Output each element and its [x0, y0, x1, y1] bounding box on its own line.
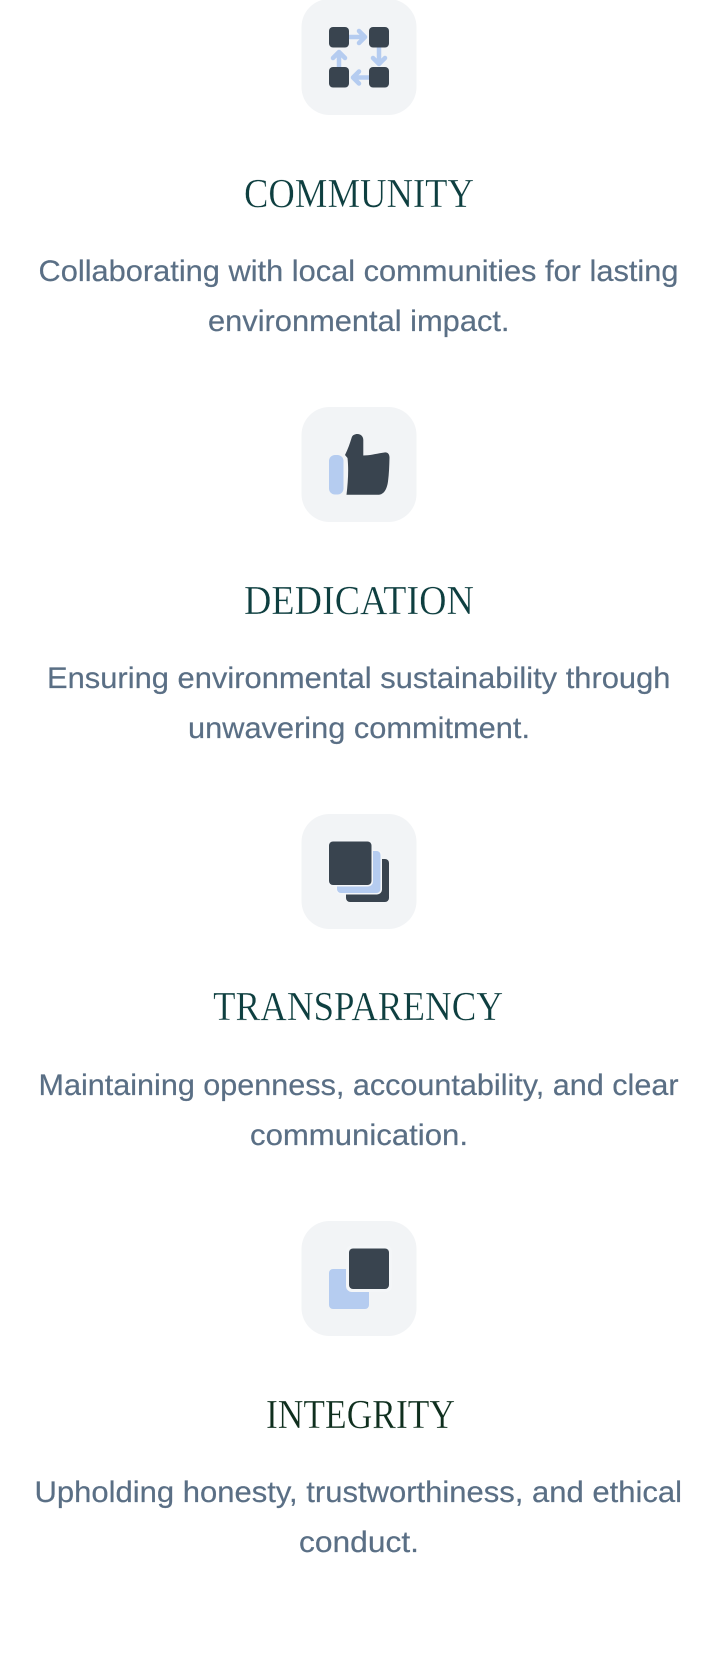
- icon: overlapping squares: [302, 1221, 416, 1336]
- text: integrity description: Upholding honesty, trustworthiness, and ethical: [34, 1476, 682, 1509]
- text: dedication description: unwavering commitment.: [188, 712, 530, 745]
- icon: thumbs up: [302, 407, 416, 522]
- text: transparency description: communication.: [250, 1119, 468, 1152]
- text: integrity description: [34, 1476, 682, 1559]
- text: community description: Collaborating with local communities for lasting: [38, 255, 678, 288]
- text: transparency description: Maintaining openness, accountability, and clear: [38, 1069, 679, 1102]
- panel: dedication: [47, 407, 670, 745]
- heading: dedication: DEDICATION: [244, 577, 474, 623]
- heading: community: COMMUNITY: [244, 170, 474, 216]
- text: dedication description: Ensuring environmental sustainability through: [47, 662, 670, 695]
- heading: transparency: TRANSPARENCY: [213, 983, 503, 1029]
- icon: connected squares with arrows: [302, 0, 416, 115]
- text: integrity description: conduct.: [299, 1526, 419, 1559]
- icon: stacked layers: [302, 814, 416, 929]
- panel: integrity: [34, 1221, 682, 1559]
- heading: integrity: INTEGRITY: [266, 1391, 455, 1437]
- text: community description: [38, 255, 678, 338]
- panel: community: [38, 0, 678, 338]
- panel: transparency: [38, 814, 679, 1152]
- text: transparency description: [38, 1069, 679, 1152]
- text: community description: environmental impact.: [208, 305, 510, 338]
- text: dedication description: [47, 662, 670, 745]
